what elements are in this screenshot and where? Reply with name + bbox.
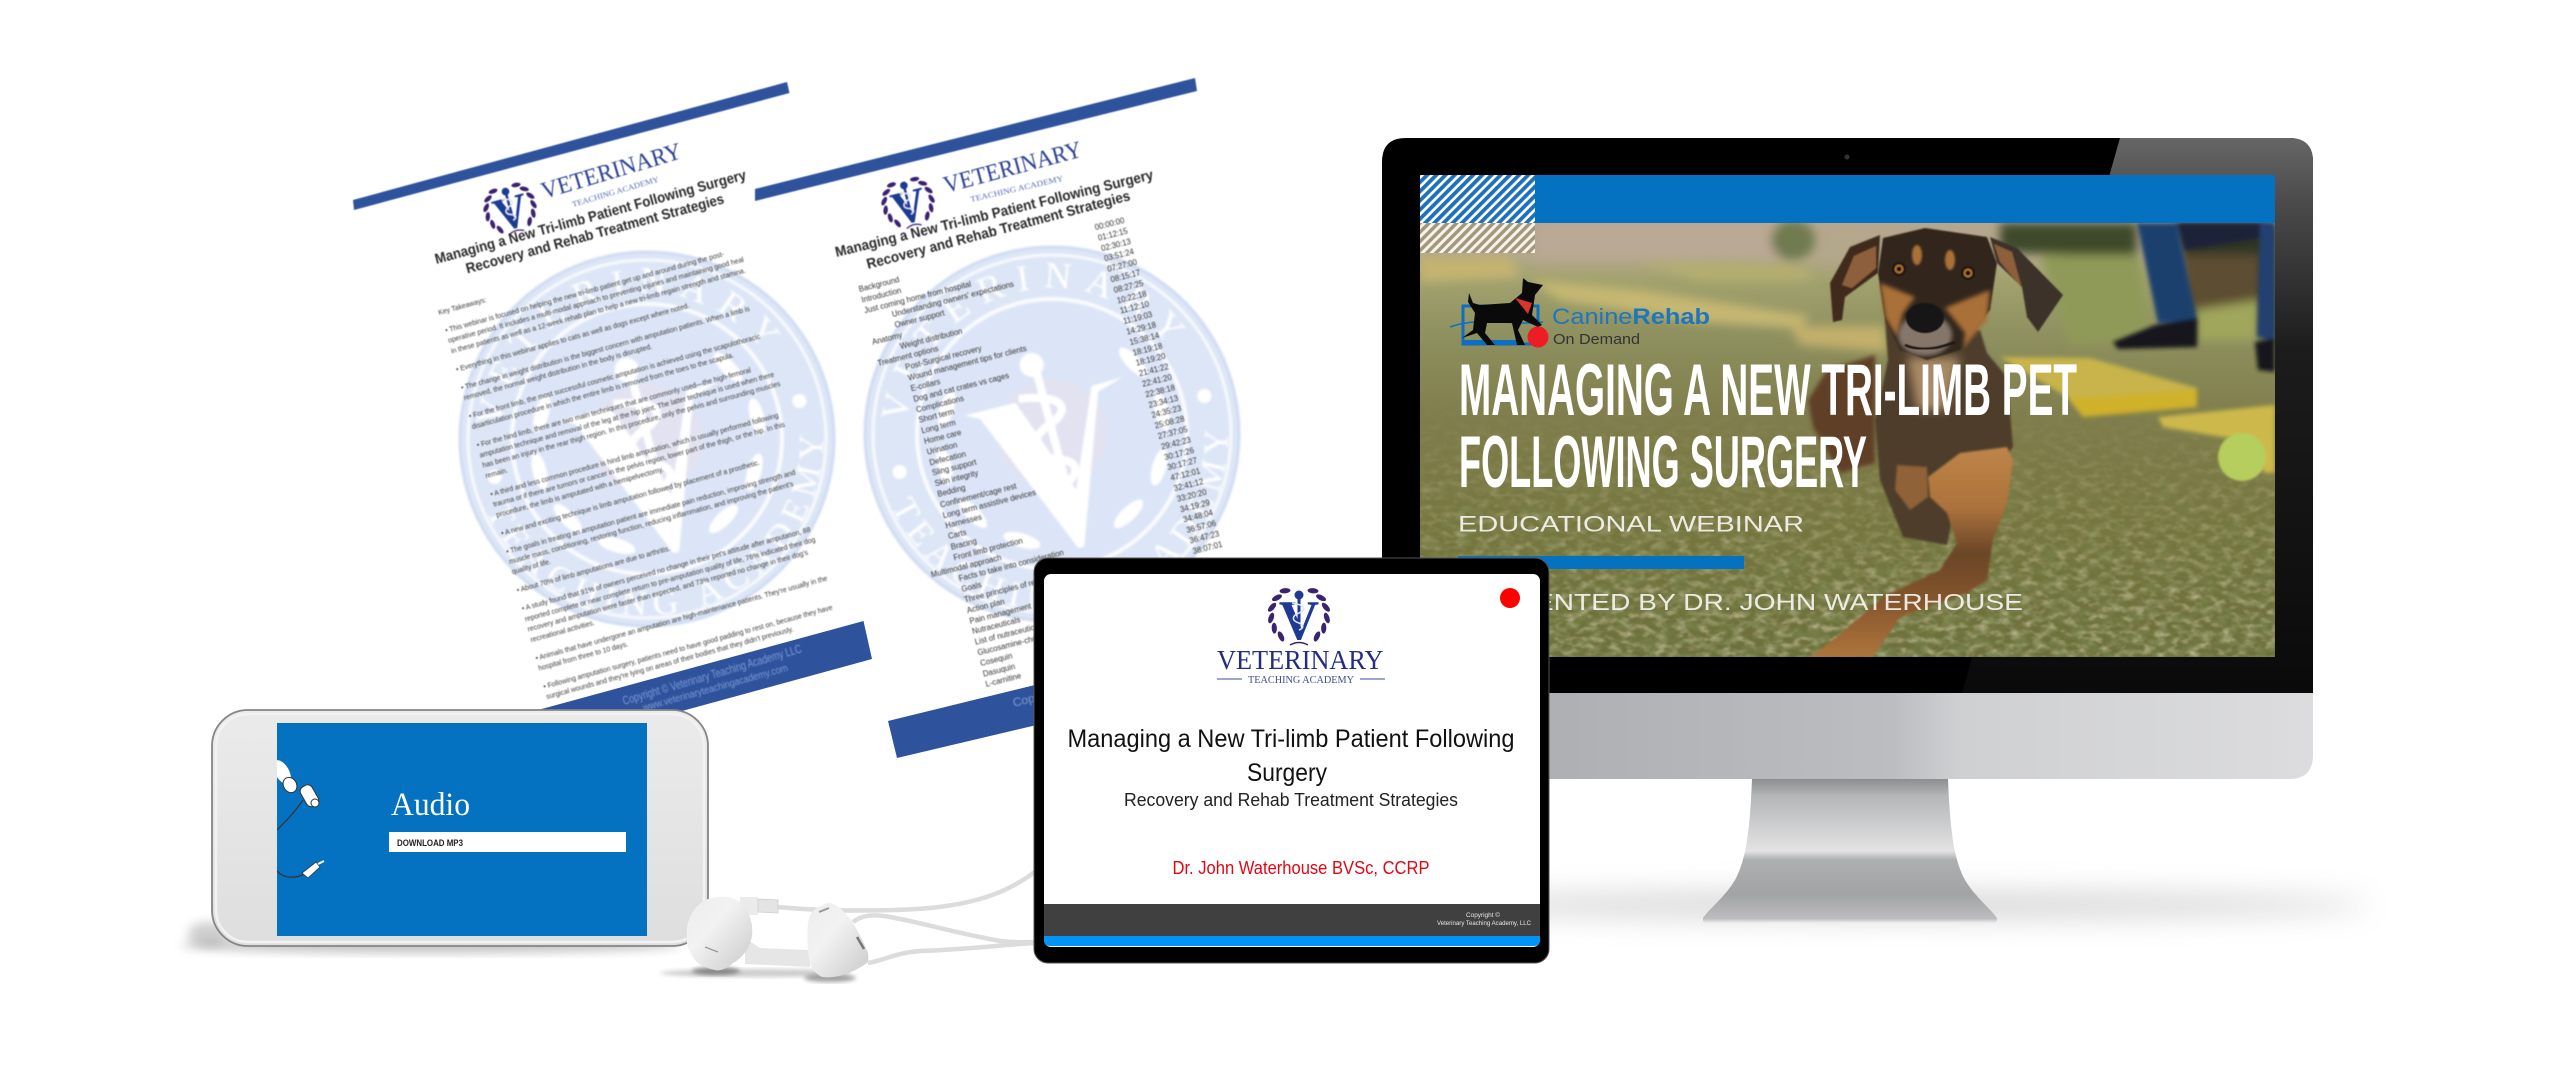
timestamps column: 36:57:06: [1185, 519, 1217, 535]
key takeaways text: • A study found that 91% of owners perceived no change in their pet's attitude after amputation, 88: [521, 527, 812, 613]
footer dark band: [1044, 904, 1540, 936]
footer band: Copyright: [1011, 684, 1065, 710]
outline list: Owner support: [894, 308, 946, 330]
outline list: Introduction: [860, 286, 902, 305]
outline list: Long term: [920, 418, 957, 435]
small blue bar: [1458, 556, 1744, 569]
outline list: Pain management: [969, 601, 1033, 626]
outline list: Three principles of rehab: [963, 575, 1050, 605]
document page 1: key takeaways: [353, 82, 875, 717]
key takeaways text: operative period. It includes a multi-modal approach to preventing injuries and maintaining good heal: [447, 257, 745, 345]
academy wordmark: VETERINARY: [1217, 645, 1384, 675]
outline list: Skin integrity: [934, 469, 979, 488]
logo: TEACHING ACADEMY: [969, 174, 1064, 204]
timestamps column: 07:27:00: [1106, 258, 1139, 274]
outline list: Long term assistive devices: [942, 488, 1037, 520]
title: Recovery and Rehab Treatment Strategies: [464, 191, 726, 277]
logo: [876, 137, 1085, 239]
key takeaways text: trauma or if there are tumors or cancer in the pelvis region, lower part of the thigh, or the hip. In this: [493, 422, 786, 509]
tan cheeks: [1880, 283, 1990, 348]
key takeaways text: reported complete or near complete return to pre-amputation quality of life, 76% indicated their dog: [524, 537, 816, 623]
dog: [1808, 228, 2063, 657]
cords: [778, 871, 1036, 963]
tablet frame: [1034, 558, 1549, 963]
tablet screen: [1044, 574, 1540, 947]
timestamps column: 33:20:20: [1176, 487, 1208, 504]
timestamps column: 15:38:14: [1129, 331, 1161, 347]
footer blue band: [1044, 936, 1540, 946]
outline list: Short term: [918, 407, 955, 425]
download button: DOWNLOAD MP3: [397, 838, 463, 849]
title: Recovery and Rehab Treatment Strategies: [865, 188, 1132, 273]
timestamps column: 14:29:18: [1125, 320, 1157, 337]
outline list: Wound management tips for clients: [907, 344, 1028, 383]
timestamps column: 29:42:23: [1160, 435, 1192, 451]
timestamps column: 30:17:26: [1163, 446, 1195, 462]
timestamps column: 36:47:23: [1189, 529, 1220, 545]
academy emblem: [1267, 588, 1331, 652]
title: Managing a New Tri-limb Patient Following Surgery: [834, 167, 1155, 261]
logo: [477, 139, 685, 246]
key takeaways text: recovery and amputation were faster than expected, and 73% reported no change in their dog's: [527, 550, 809, 634]
timestamps column: 10:22:18: [1116, 289, 1148, 305]
key takeaways text: • The change in weight distribution is the biggest concern with amputation patients. When a limb is: [460, 306, 751, 392]
footer band: Copyright © Veterinary Teaching Academy LLC: [621, 642, 803, 708]
black bezel: [1382, 138, 2313, 693]
outline list: Action plan: [966, 597, 1005, 615]
key takeaways text: • Everything in this webinar applies to cats as well as dogs except where noted.: [455, 303, 690, 374]
left bud: [687, 897, 752, 970]
key takeaways text: • A new and exciting technique is limb amputation followed by placement of a prosthetic.: [500, 460, 761, 537]
timestamps column: 22:38:18: [1144, 383, 1176, 399]
key takeaways text: • Animals that have undergone an amputation are high-maintenance patients. They're usually in the: [535, 575, 828, 662]
timestamps column: 23:34:13: [1148, 394, 1179, 410]
stripes block: [1420, 175, 1535, 253]
watermark seal: [419, 211, 875, 667]
outline list: Carts: [947, 528, 968, 541]
key takeaways text: disarticulation procedure in which the entire limb is removed from the toes to the scapula.: [471, 352, 735, 431]
monitor: [1382, 138, 2370, 924]
outline list: Sling support: [931, 458, 978, 478]
timestamps column: 30:17:27: [1166, 456, 1198, 472]
outline list: Dasuquin: [982, 662, 1016, 679]
key takeaways text: procedure, the limb is amputated with a hemipelvectomy.: [495, 466, 665, 519]
timestamps column: 25:08:28: [1154, 414, 1185, 431]
presenter: PRESENTED BY DR. JOHN WATERHOUSE: [1458, 589, 2023, 615]
key takeaways text: surgical wounds and they're lying on areas of their bodies that they didn't previously.: [546, 626, 794, 701]
footer band: [530, 621, 872, 717]
monitor shadow: [1430, 891, 2370, 919]
tennis ball: [2218, 433, 2266, 481]
canine rehab logo: Canine Rehab: [1552, 304, 1710, 329]
footer band: www.veterinaryteachingacademy.com: [641, 663, 789, 714]
canine rehab logo: [1450, 278, 1710, 348]
outline list: Cosequin: [979, 651, 1013, 668]
top bar: [755, 78, 1197, 201]
key takeaways text: Key Takeaways:: [438, 297, 487, 317]
bud shadows: [660, 969, 850, 977]
logo: TEACHING ACADEMY: [571, 175, 660, 209]
timestamps column: 11:19:03: [1122, 310, 1153, 326]
outline list: Treatment options: [876, 344, 939, 368]
audio heading: Audio: [391, 787, 470, 823]
download button: [389, 832, 626, 852]
key takeaways text: [438, 228, 846, 702]
outline list: Confinement/cage rest: [939, 481, 1018, 509]
logo: VETERINARY: [941, 137, 1085, 199]
outline list: Harnesses: [944, 513, 983, 531]
top blue bar: [1535, 175, 2275, 223]
outline list: E-collars: [910, 377, 941, 393]
slide subtitle: Recovery and Rehab Treatment Strategies: [1124, 789, 1458, 810]
red dot: [1500, 588, 1520, 608]
key takeaways text: muscle mass, conditioning, restoring function, reducing inflammation, and improving the patient's: [508, 481, 795, 566]
key takeaways text: • A third and less common procedure is hind limb amputation, which is usually performed following: [490, 412, 780, 499]
phone shadow: [180, 937, 680, 953]
timestamps column: 18:19:20: [1135, 352, 1167, 368]
webinar title: [1459, 350, 2077, 503]
dog photo: [1420, 220, 2275, 657]
outline list: Multimodal approach: [930, 553, 1002, 579]
presenter name: Dr. John Waterhouse BVSc, CCRP: [1172, 857, 1430, 878]
tablet: [1034, 558, 1549, 963]
timestamps column: 00:00:00: [1094, 216, 1126, 232]
outline list: L-carnitine: [985, 671, 1022, 689]
footer band: [888, 669, 1100, 758]
key takeaways text: • For the hind limb, there are two main techniques that are commonly used—the high-femoral: [476, 367, 752, 449]
timestamps column: 38:07:01: [1192, 540, 1223, 556]
grass texture: [1420, 432, 2275, 657]
timestamps column: 32:41:12: [1173, 477, 1204, 493]
outline list: [858, 248, 1109, 695]
eyebrows: [1912, 245, 1955, 270]
outline list: Goals: [961, 580, 983, 594]
right bud: [807, 903, 868, 977]
watermark seal: [824, 206, 1280, 662]
webinar title: FOLLOWING SURGERY: [1459, 422, 1867, 503]
outline list: Bedding: [936, 483, 966, 499]
torso: [1875, 320, 2013, 545]
right ear: [1990, 237, 2063, 332]
stem: [740, 897, 778, 915]
screen: [1420, 175, 2275, 657]
hind body: [1808, 355, 1875, 473]
outline list: Understanding owners' expectations: [891, 280, 1015, 319]
slide title: Managing a New Tri-limb Patient Following: [1068, 725, 1514, 753]
timestamps column: 02:30:13: [1100, 237, 1132, 253]
key takeaways text: hospital from three to 10 days.: [538, 641, 629, 673]
timestamps column: 11:12:10: [1119, 300, 1151, 316]
bridge: [745, 938, 810, 967]
key takeaways text: • The goals in treating an amputation patient are immediate pain reduction, improving strength and: [506, 469, 796, 556]
key takeaways text: • This webinar is focused on helping the new tri-limb patient get up and around during the post-: [445, 251, 725, 335]
blurred background: [1420, 220, 2275, 352]
timestamps column: 03:51:24: [1103, 247, 1136, 263]
key takeaways text: in these patients as well as a 12-week rehab plan to help a new tri-limb regain strength and stamina.: [450, 268, 747, 355]
camera: [1844, 154, 1850, 160]
outline list: Weight distribution: [899, 327, 963, 351]
key takeaways text: quality of life.: [511, 559, 552, 576]
logo: VETERINARY: [538, 139, 685, 205]
outline list: Glucosamine-chondroitin: [977, 628, 1062, 657]
head: [1878, 228, 1997, 360]
key takeaways text: recreational activities.: [530, 620, 596, 644]
timestamps column: 47:12:01: [1170, 467, 1201, 483]
outline list: Nutraceuticals: [971, 615, 1021, 636]
timestamps column: 34:48:04: [1182, 508, 1215, 525]
left ear: [1830, 235, 1880, 322]
phone body: [212, 710, 708, 946]
timestamps column: 21:41:22: [1138, 362, 1170, 378]
stand: [1703, 779, 1997, 924]
eyes: [1892, 262, 1975, 280]
key takeaways text: amputation technique and removal of the leg at the hip joint. The latter technique is used when there: [479, 372, 775, 460]
key takeaways text: removed, the normal weight distribution in the body is disrupted.: [463, 344, 653, 402]
top bar: [353, 82, 790, 210]
key takeaways text: has been an injury in the rear thigh region. In this procedure, only the pelvis and surrounding muscles: [482, 381, 782, 470]
canine rehab logo: On Demand: [1553, 331, 1640, 348]
chest: [1907, 357, 1960, 410]
outline list: Front limb protection: [953, 536, 1024, 562]
footer dark band: Veterinary Teaching Academy, LLC: [1437, 920, 1531, 927]
outline list: Facts to take into consideration: [958, 548, 1065, 583]
key takeaways text: • Following amputation surgery, patients need to have good padding to rest on, because they have: [543, 605, 834, 691]
outline list: Background: [858, 275, 900, 294]
document page 2: outline with timestamps: [755, 78, 1280, 758]
jeans and shoes: [2113, 223, 2275, 372]
key takeaways text: remain.: [485, 467, 509, 480]
earphones illustration: [277, 760, 324, 878]
outline list: Defecation: [928, 449, 967, 467]
timestamps column: 24:35:23: [1151, 404, 1182, 420]
outline list: Home care: [923, 428, 962, 446]
timestamps column: 08:27:25: [1113, 278, 1145, 295]
muzzle: [1898, 314, 1952, 356]
outline list: Complications: [915, 394, 965, 414]
outline list: Anatomy: [871, 330, 903, 347]
outline list: Urination: [926, 440, 958, 457]
timestamps column: 01:12:15: [1097, 226, 1129, 243]
outline list: List of nutraceuticals: [974, 621, 1045, 647]
key takeaways text: • For the front limb, the most successful cosmetic amputation is achieved using the scapulothoracic: [468, 334, 762, 421]
slide title: [1068, 725, 1514, 787]
yellow ramps: [2000, 357, 2275, 473]
outline list: Dog and cat crates vs cages: [912, 371, 1010, 404]
front leg: [1810, 447, 2013, 657]
slide title: Surgery: [1247, 759, 1327, 787]
footer dark band: Copyright ©: [1466, 911, 1500, 919]
timestamps column: 27:37:05: [1157, 425, 1189, 441]
timestamps column: 34:19:29: [1179, 498, 1211, 514]
outline list: Bracing: [950, 537, 978, 552]
timestamps column: [1094, 212, 1223, 560]
phone screen: [277, 723, 647, 936]
earbuds: [660, 871, 1036, 982]
outline list: Post-Surgical recovery: [904, 344, 983, 372]
key takeaways text: • About 70% of limb amputations are due to arthritis.: [516, 546, 671, 595]
title: Managing a New Tri-limb Patient Following Surgery: [433, 167, 748, 268]
subtitle: EDUCATIONAL WEBINAR: [1458, 512, 1804, 536]
curled paw: [1895, 465, 1928, 510]
timestamps column: 08:15:17: [1110, 268, 1141, 284]
academy wordmark: TEACHING ACADEMY: [1248, 674, 1354, 686]
phone: [180, 710, 708, 953]
nose: [1906, 303, 1944, 333]
silver chin: [1382, 690, 2313, 779]
bezel reflection: [1962, 138, 2313, 693]
timestamps column: 22:41:20: [1141, 372, 1173, 389]
outline list: Just coming home from hospital: [863, 279, 972, 315]
timestamps column: 18:19:18: [1132, 341, 1163, 357]
